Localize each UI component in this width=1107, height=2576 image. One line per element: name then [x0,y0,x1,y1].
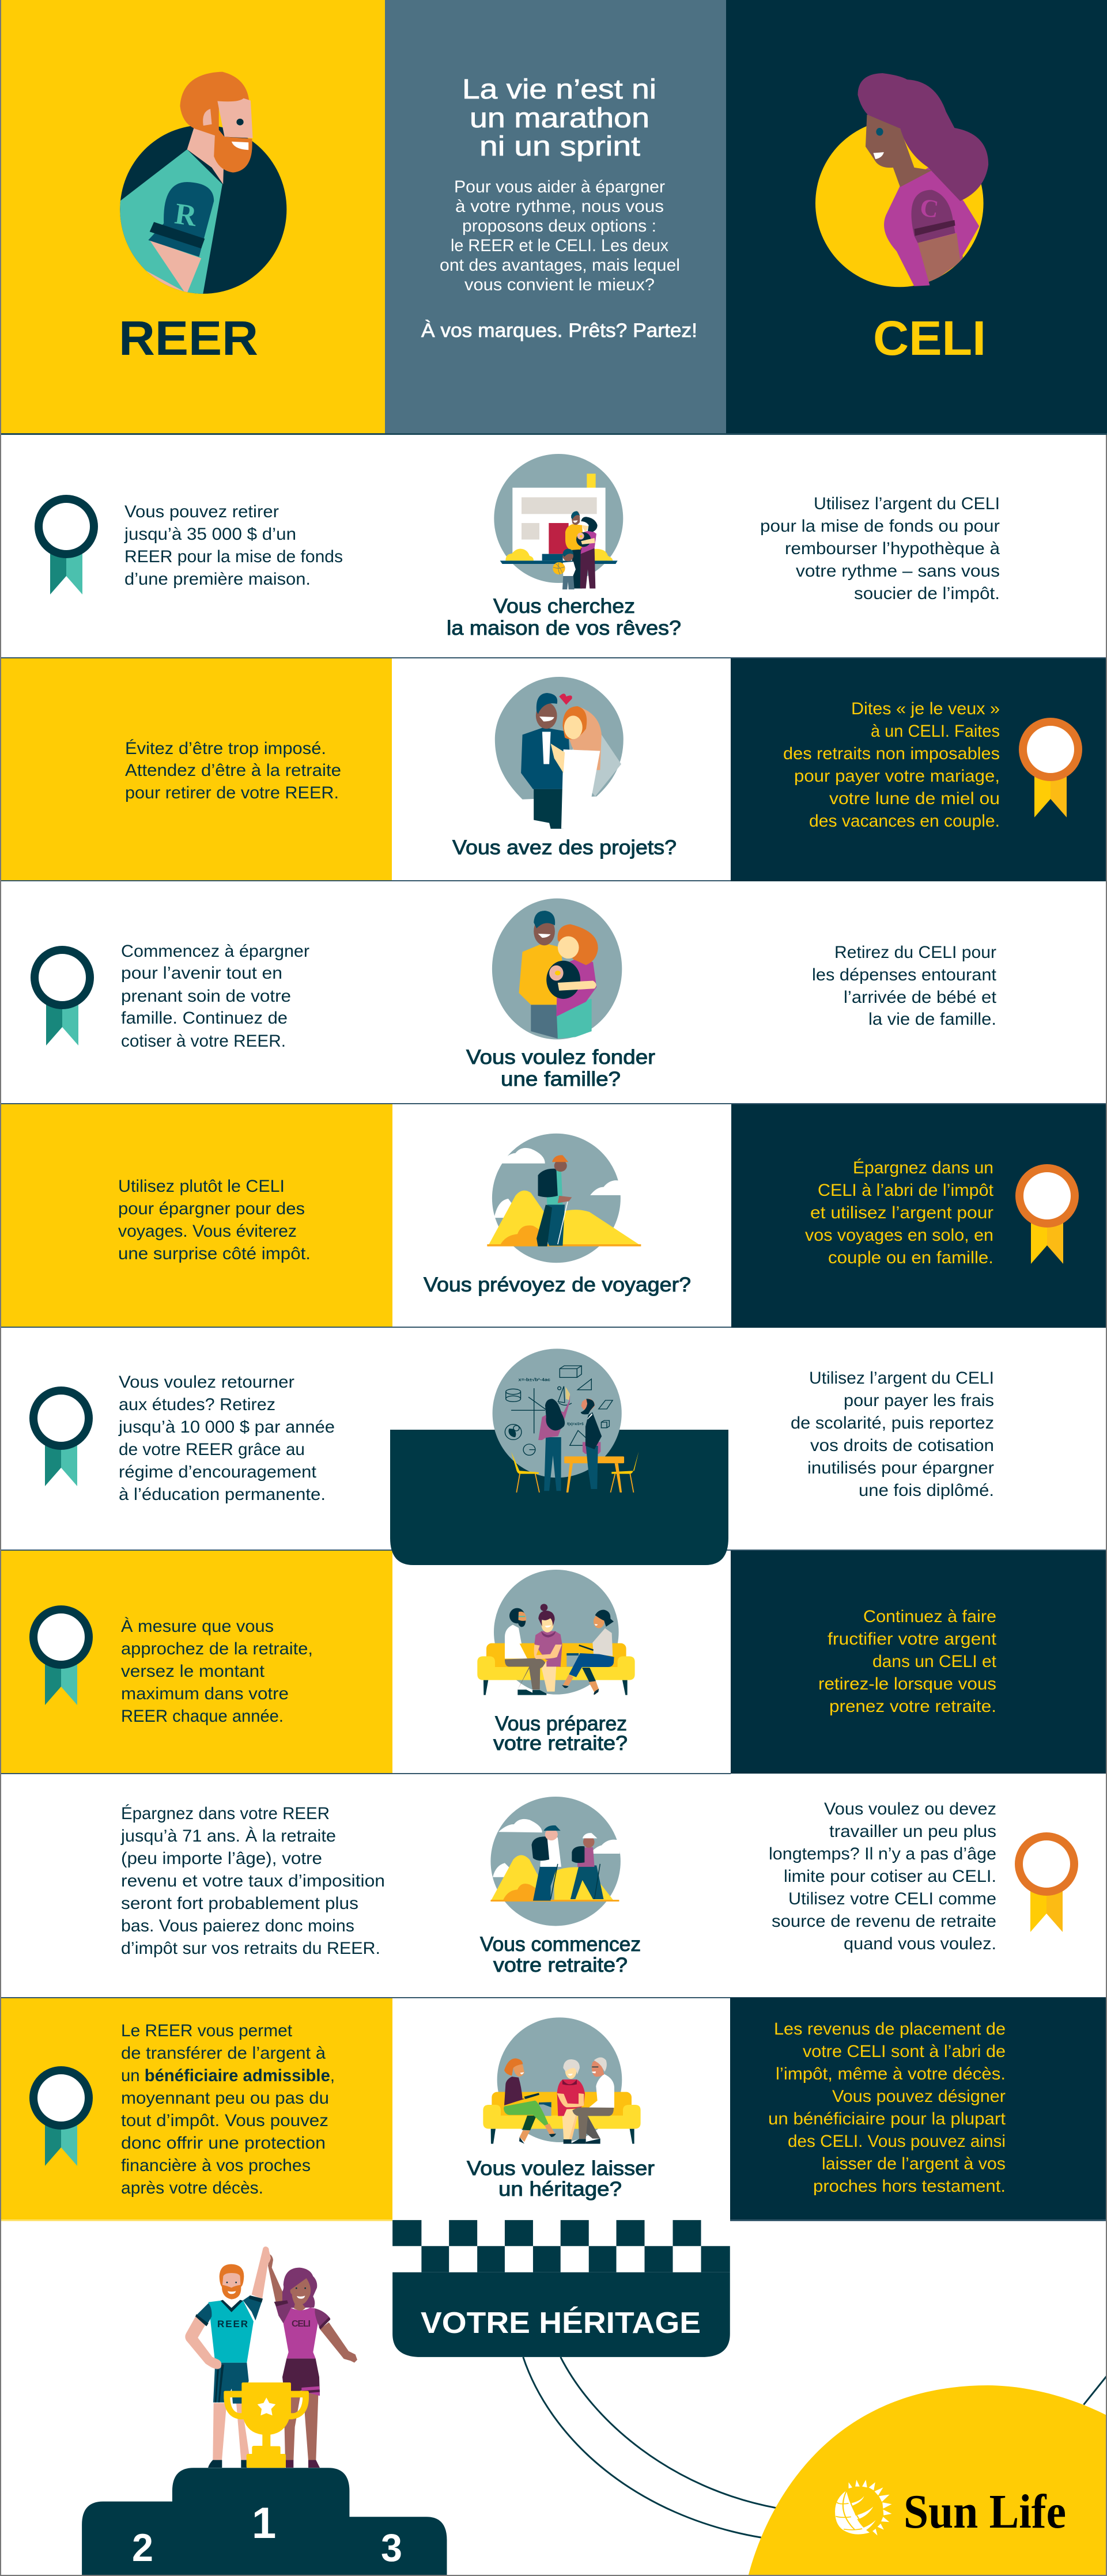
illustration: seniors on sofa [483,2017,641,2144]
text: CELI travel: Épargnez dans un [853,1158,993,1177]
text: CELI education: de scolarité, puis reportez [791,1414,994,1433]
heading: question 1: la maison de vos rêves? [447,617,681,639]
text: CELI wedding: votre lune de miel ou [829,789,1000,808]
text: REER education: jusqu’à 10 000 $ par année [118,1418,335,1437]
text: CELI preparing [818,1607,997,1716]
text: CELI legacy: l’impôt, même à votre décès. [776,2064,1006,2083]
text: intro: La vie n’est ni [462,74,656,105]
icon: REER runner [120,72,286,296]
text: CELI travel: couple ou en famille. [828,1248,993,1267]
panel: row 8 legacy [0,1998,1107,2221]
heading: question 7: votre retraite? [493,1954,628,1976]
text: REER preparing: maximum dans votre [121,1684,289,1703]
text: CELI house: rembourser l’hypothèque à [785,539,1000,558]
jersey label: REER: REER [217,2319,248,2329]
text: REER legacy: de transférer de l’argent à [121,2044,326,2063]
text: CELI wedding: à un CELI. Faites [871,722,1000,741]
illustration: three people on sofa [477,1570,635,1695]
podium number 3: 3 [381,2526,402,2570]
text: CELI starting: Vous voulez ou devez [824,1800,996,1819]
text: CELI legacy: un bénéficiaire pour la plupart [768,2109,1006,2128]
logo: Sun Life [835,2480,1066,2539]
text: REER education: régime d’encouragement [119,1463,317,1482]
text: REER travel: une surprise côté impôt. [118,1244,311,1263]
text: intro: Pour vous aider à épargner [454,177,665,196]
text: CELI starting [769,1800,996,1953]
text: CELI family: Retirez du CELI pour [834,943,996,962]
icon: ribbon [39,499,94,594]
function label: f(x)=x/3+5 [567,1422,584,1426]
heading: REER: REER [119,311,258,365]
text: CELI family: les dépenses entourant [812,965,997,984]
illustration: hiker [487,1134,641,1263]
text: CELI house: Utilisez l’argent du CELI [814,494,1000,513]
text: REER family: pour l’avenir tout en [121,964,282,983]
dark tab behind illustration [390,1430,728,1565]
text: REER legacy: un bénéficiaire admissible, [121,2066,335,2085]
text: REER education [118,1373,335,1504]
heading: question 8: un héritage? [498,2178,622,2200]
text: CELI starting: Utilisez votre CELI comme [788,1889,996,1908]
heading: question 6: votre retraite? [493,1732,628,1755]
text: REER travel: Utilisez plutôt le CELI [118,1177,285,1196]
text: CELI wedding: Dites « je le veux » [851,699,1000,718]
text: REER wedding: Évitez d’être trop imposé. [125,739,326,758]
wordmark: Sun Life [904,2485,1066,2539]
text: REER legacy: donc offrir une protection [121,2134,326,2153]
text: CELI preparing: retirez-le lorsque vous [818,1675,996,1694]
text: REER legacy: après votre décès. [121,2179,263,2198]
text: CELI preparing: dans un CELI et [872,1652,997,1671]
text: CELI travel [805,1158,994,1267]
text: REER preparing: versez le montant [121,1662,265,1681]
text: CELI legacy: des CELI. Vous pouvez ainsi [788,2132,1006,2151]
text: REER starting: Épargnez dans votre REER [121,1804,330,1823]
text: REER house: d’une première maison. [124,570,311,589]
label: R on sleeve: R [173,198,199,233]
text: REER house [124,502,343,589]
text: CELI starting: source de revenu de retraite [772,1912,996,1931]
icon: ribbon [33,1391,89,1486]
text: CELI starting: quand vous voulez. [844,1934,996,1953]
text: CELI education: une fois diplômé. [859,1481,994,1500]
text: intro: proposons deux options : [462,217,656,236]
text: CELI legacy: Les revenus de placement de [774,2020,1006,2039]
text: REER house: REER pour la mise de fonds [124,547,343,566]
text: REER wedding [125,739,341,802]
illustration: house and family [494,454,623,589]
text: CELI wedding: des vacances en couple. [809,812,1000,831]
text: CELI legacy: Vous pouvez désigner [832,2087,1006,2106]
text: intro: ni un sprint [479,131,640,162]
icon: ribbon [1019,1836,1074,1932]
illustration: students at blackboard [493,1348,638,1492]
panel: row 6 preparing retirement [0,1550,1107,1774]
text: CELI legacy: votre CELI sont à l’abri de [803,2042,1006,2061]
text: CELI house: soucier de l’impôt. [854,584,1000,603]
text: REER legacy: financière à vos proches [121,2156,311,2175]
text: REER family: famille. Continuez de [121,1009,288,1028]
heading: question 3 [466,1046,655,1090]
heading: CELI: CELI [873,311,986,365]
text: REER legacy [121,2021,335,2198]
icon: ribbon [33,1609,89,1705]
text: REER family: Commencez à épargner [121,942,309,961]
text: CELI starting: longtemps? Il n’y a pas d’âge [769,1844,996,1863]
icon: ribbon [35,950,90,1045]
panel: row 7 starting retirement [0,1774,1107,1998]
text: REER starting: revenu et votre taux d’imposition [121,1872,385,1891]
heading: question 4: Vous prévoyez de voyager? [424,1274,691,1296]
heading: question 8 [467,2157,655,2200]
text: CELI family [812,943,997,1029]
illustration: winners and trophy [185,2247,357,2468]
text: CELI preparing: fructifier votre argent [828,1630,997,1649]
text: REER house: Vous pouvez retirer [124,502,279,521]
text: REER preparing: approchez de la retraite, [121,1639,313,1658]
text: CELI house: votre rythme – sans vous [796,562,1000,581]
podium number 1: 1 [252,2499,276,2548]
text: REER family: prenant soin de votre [121,987,291,1006]
text: intro: À vos marques. Prêts? Partez! [421,320,697,342]
heading: question 7: Vous commencez [480,1933,641,1956]
text: REER starting: seront fort probablement plus [121,1894,358,1913]
heading: question 3: Vous voulez fonder [466,1046,655,1069]
heading: question 1: Vous cherchez [493,595,635,618]
banner: votre heritage [392,2220,730,2357]
text: CELI wedding: pour payer votre mariage, [794,767,1000,786]
text: CELI preparing: Continuez à faire [863,1607,996,1626]
icon: ribbon [1019,1168,1075,1264]
heading: question 6: Vous préparez [495,1713,627,1735]
icon: ribbon [1023,722,1078,817]
panel: row 2 wedding [0,658,1107,881]
text: CELI wedding: des retraits non imposables [783,744,1000,763]
text: REER legacy: Le REER vous permet [121,2021,293,2040]
text: CELI education: inutilisés pour épargner [807,1459,994,1478]
icon: ribbon [33,2070,89,2166]
text: REER legacy: moyennant peu ou pas du [121,2089,329,2108]
text: CELI education [791,1369,994,1500]
text: intro: à votre rythme, nous vous [455,197,664,216]
heading: question 8: Vous voulez laisser [467,2157,655,2180]
text: REER starting: bas. Vous paierez donc moins [121,1916,354,1935]
text: REER wedding: pour retirer de votre REER. [125,783,339,802]
panel: row 4 travel [0,1104,1107,1328]
text: REER starting: jusqu’à 71 ans. À la retraite [120,1827,336,1846]
text: CELI family: la vie de famille. [868,1010,996,1029]
heading: question 2: Vous avez des projets? [452,836,677,859]
heading: question 6 [493,1713,628,1755]
text: REER house: jusqu’à 35 000 $ d’un [124,525,296,544]
text: CELI education: vos droits de cotisation [810,1436,994,1455]
track lines [523,2357,1107,2537]
math formula: x=-b±√b²-4ac [519,1377,550,1382]
label: C on sleeve: C [919,193,940,223]
text: REER starting: d’impôt sur vos retraits du REER. [121,1939,380,1958]
text: REER education: aux études? Retirez [119,1395,275,1414]
text: CELI family: l’arrivée de bébé et [844,988,997,1007]
panel: row 3 family [0,881,1107,1104]
heading: votre heritage: VOTRE HÉRITAGE [421,2306,701,2340]
text: REER travel [118,1177,311,1263]
text: REER family: cotiser à votre REER. [121,1032,286,1051]
text: CELI education: Utilisez l’argent du CELI [809,1369,994,1388]
text: CELI starting: travailler un peu plus [829,1822,996,1841]
podium number 2: 2 [132,2526,153,2570]
text: intro [421,74,697,342]
yellow hill [748,2385,1107,2576]
text: intro: un marathon [470,103,649,134]
text: REER starting: (peu importe l’âge), votre [121,1849,322,1868]
illustration: two hikers [490,1797,621,1926]
text: REER preparing: À mesure que vous [121,1617,274,1636]
text: CELI house: pour la mise de fonds ou pour [760,517,1000,536]
icon: sun globe [835,2480,891,2536]
text: intro: le REER et le CELI. Les deux [451,236,668,255]
text: CELI legacy [768,2020,1006,2196]
text: REER education: Vous voulez retourner [119,1373,294,1392]
text: REER wedding: Attendez d’être à la retraite [125,761,341,780]
text: CELI education: pour payer les frais [844,1391,994,1410]
text: CELI travel: CELI à l’abri de l’impôt [818,1181,994,1200]
text: REER education: de votre REER grâce au [119,1440,305,1459]
icon: CELI runner [815,73,988,287]
panel: header [0,0,1107,435]
text: intro: vous convient le mieux? [464,275,655,294]
illustration: family with baby [492,899,622,1039]
text: intro: ont des avantages, mais lequel [440,256,680,275]
text: CELI preparing: prenez votre retraite. [829,1697,996,1716]
panel: row 1 house [0,435,1107,658]
heading: question 7 [480,1933,641,1976]
text: REER education: à l’éducation permanente. [119,1485,326,1504]
text: CELI wedding [783,699,1000,831]
illustration: wedding couple [495,677,624,829]
text: CELI legacy: proches hors testament. [813,2177,1006,2196]
jersey label: CELI: CELI [292,2319,311,2329]
text: CELI travel: vos voyages en solo, en [805,1226,993,1245]
text: REER travel: pour épargner pour des [118,1199,305,1218]
text: REER preparing [121,1617,313,1726]
heading: question 3: une famille? [501,1068,621,1090]
text: REER legacy: tout d’impôt. Vous pouvez [121,2111,328,2130]
text: REER preparing: REER chaque année. [121,1707,284,1726]
text: REER starting [120,1804,385,1958]
illustration: podium [82,2468,447,2575]
text: REER travel: voyages. Vous éviterez [118,1222,297,1241]
heading: question 1 [447,595,681,639]
text: CELI starting: limite pour cotiser au CELI. [784,1867,996,1886]
text: CELI house [760,494,1000,603]
text: CELI travel: et utilisez l’argent pour [810,1203,993,1222]
text: CELI legacy: laisser de l’argent à vos [822,2154,1006,2173]
panel: finish [0,2219,1107,2576]
panel: row 5 education [0,1328,1107,1565]
text: REER family [121,942,309,1051]
